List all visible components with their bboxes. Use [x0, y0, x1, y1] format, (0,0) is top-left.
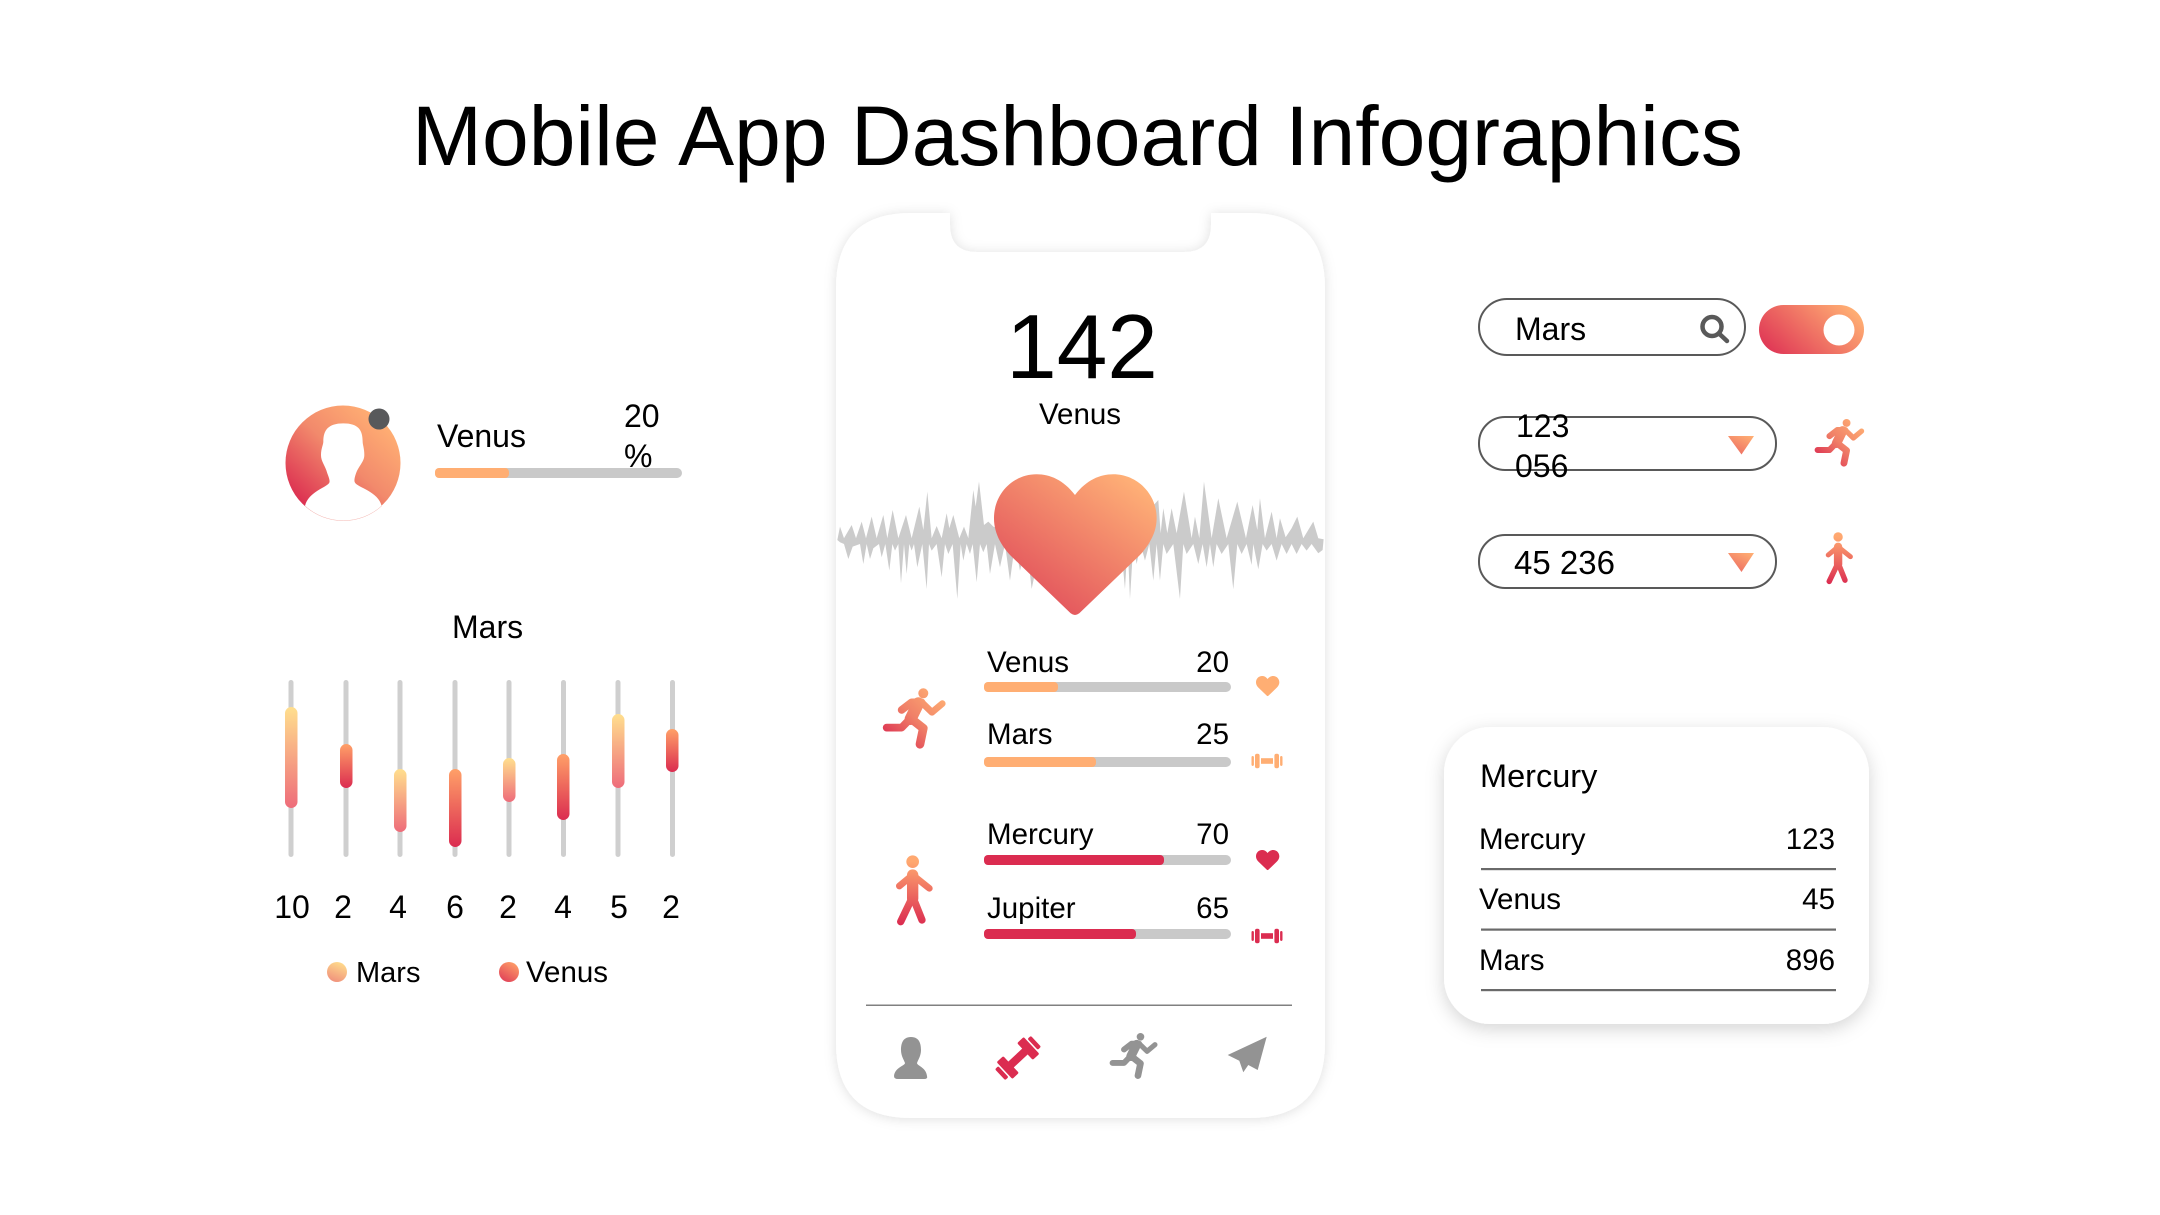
- row: Mercury: 70: [1196, 818, 1229, 851]
- card background: [1444, 727, 1869, 1024]
- chart tracks: [288, 680, 675, 857]
- card row: Mercury: [1479, 823, 1835, 856]
- chart legend: [327, 956, 608, 989]
- panel: controls: [1479, 299, 1864, 588]
- profile percentage: %: [624, 438, 652, 474]
- row: Mars: 25: [1196, 718, 1229, 751]
- profile percentage: [624, 398, 660, 474]
- dropdown 1 arrow: [1728, 436, 1754, 454]
- chart axis labels: 4: [389, 889, 407, 925]
- icon: paper plane nav: [1228, 1037, 1267, 1072]
- profile progress bar: [435, 468, 682, 478]
- big heart: [994, 474, 1157, 615]
- card row: Mercury: 123: [1786, 823, 1835, 856]
- row: Mercury: [984, 818, 1279, 870]
- panel: data card: [1444, 727, 1869, 1024]
- chart axis labels: 2: [499, 889, 517, 925]
- icon: runner: [887, 688, 942, 744]
- card row: Venus: 45: [1802, 883, 1835, 916]
- card row: Venus: [1479, 883, 1835, 916]
- heartbeat waveform: [837, 482, 1324, 599]
- chart axis labels: 10: [274, 889, 310, 925]
- dropdown 1: [1479, 417, 1776, 470]
- dropdown 1 value: 123: [1516, 408, 1569, 444]
- chart axis labels: 6: [446, 889, 464, 925]
- row: Venus: [984, 646, 1279, 696]
- row: Mars: Mars: [987, 718, 1053, 751]
- chart legend: Venus: [526, 956, 608, 989]
- dropdown 2 value: 45 236: [1514, 544, 1615, 581]
- heart rate value: 142: [1006, 297, 1158, 398]
- row: Jupiter: Jupiter: [987, 892, 1076, 925]
- icon: dumbbell nav: [992, 1033, 1044, 1083]
- toggle switch: [1759, 305, 1864, 354]
- chart axis labels: 2: [662, 889, 680, 925]
- search field: [1479, 299, 1745, 355]
- chart axis labels: 4: [554, 889, 572, 925]
- panel: range chart: [274, 609, 680, 989]
- icon: walker small: [1828, 532, 1850, 581]
- profile percentage: 20: [624, 398, 660, 434]
- chart title: Mars: [452, 609, 523, 645]
- card row: Mercury: Mercury: [1479, 823, 1586, 856]
- row: Venus: 20: [1196, 646, 1229, 679]
- nav divider: [866, 1004, 1292, 1006]
- panel: phone: [836, 213, 1325, 1118]
- dropdown 1 value: 056: [1515, 448, 1568, 484]
- chart legend: Mars: [356, 957, 420, 989]
- dropdown 1 value: [1515, 408, 1569, 484]
- icon: walker: [899, 855, 929, 922]
- profile label: Venus: [437, 418, 526, 454]
- icon: runner nav: [1113, 1033, 1155, 1076]
- card row: Mars: Mars: [1479, 944, 1545, 977]
- row: Mars: [984, 718, 1282, 768]
- chart axis labels: [274, 889, 680, 925]
- row: Jupiter: [984, 892, 1282, 943]
- card heading: Mercury: [1480, 758, 1598, 794]
- search text: Mars: [1515, 311, 1586, 347]
- row: Jupiter: 65: [1196, 892, 1229, 925]
- dropdown 2: [1479, 535, 1776, 588]
- chart range bars: [285, 707, 678, 847]
- row: Mercury: Mercury: [987, 818, 1094, 851]
- dropdown 2 arrow: [1728, 553, 1754, 572]
- title: Mobile App Dashboard Infographics: [412, 89, 1743, 183]
- card row: Venus: Venus: [1479, 883, 1561, 916]
- icon: person nav: [894, 1037, 927, 1079]
- row: Venus: Venus: [987, 646, 1069, 679]
- panel: profile summary: [286, 398, 682, 521]
- chart axis labels: 2: [334, 889, 352, 925]
- card row: Mars: [1479, 944, 1835, 977]
- card row: Mars: 896: [1786, 944, 1835, 977]
- phone body: [836, 213, 1325, 1118]
- chart axis labels: 5: [610, 889, 628, 925]
- icon: magnifier: [1702, 317, 1727, 341]
- heart rate label: Venus: [1039, 398, 1121, 431]
- icon: runner small: [1818, 419, 1862, 463]
- avatar: [286, 406, 400, 521]
